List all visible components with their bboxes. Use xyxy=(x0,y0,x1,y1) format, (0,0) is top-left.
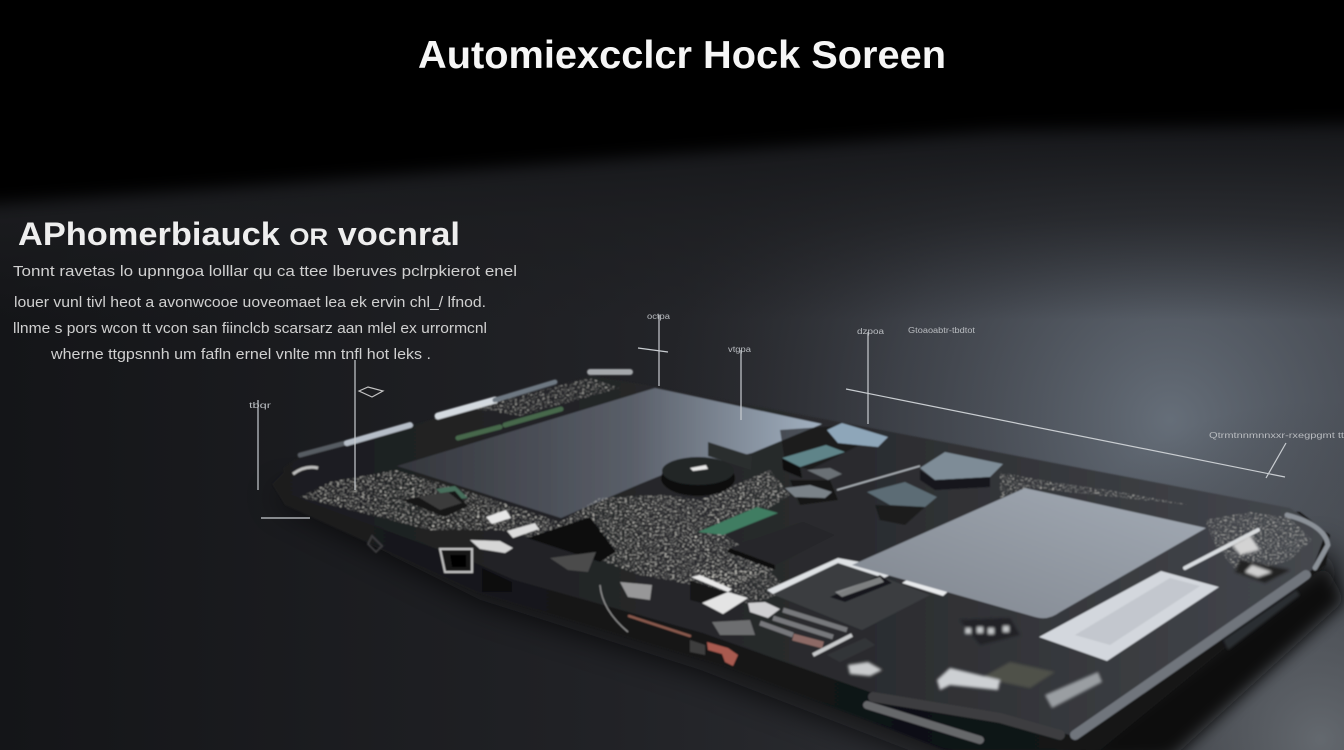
annotation labels: vtgpa xyxy=(728,345,752,354)
body text block: wherne ttgpsnnh um fafln ernel vnlte mn tnfl hot leks . xyxy=(50,346,431,363)
phone top surface xyxy=(283,376,1326,735)
lower right components xyxy=(848,535,1300,708)
big battery panel xyxy=(852,488,1206,618)
body text block: Tonnt ravetas lo upnngoa lolllar qu ca ttee lberuves pclrpkierot enel xyxy=(13,263,517,280)
exploded phone xyxy=(272,370,1330,750)
annotation labels: tbqr xyxy=(249,401,272,410)
annotation lines xyxy=(258,315,1286,518)
subheading: APhomerbiauck OR vocnral xyxy=(18,216,460,252)
annotation labels xyxy=(249,312,1344,440)
body text block: louer vunl tivl heot a avonwcooe uoveomaet lea ek ervin chl_/ lfnod. xyxy=(14,294,486,311)
lower chip block xyxy=(690,558,953,666)
silver plate inset xyxy=(1075,578,1200,645)
annotation labels: octpa xyxy=(647,312,671,321)
annotation labels: Qtrmtnnmnnxxr-rxegpgmt tt xyxy=(1209,431,1344,440)
icon: small diamond marker xyxy=(359,387,383,397)
large screen panel xyxy=(397,388,822,518)
green circuit chips xyxy=(436,409,778,535)
body text block xyxy=(13,263,517,363)
left board components xyxy=(293,467,652,632)
body text block: llnme s pors wcon tt vcon san fiinclcb scarsarz aan mlel ex urrormcnl xyxy=(13,320,487,337)
silver plate xyxy=(1039,571,1219,661)
phone shadow xyxy=(270,490,1344,750)
title: Automiexcclcr Hock Soreen xyxy=(418,34,946,77)
annotation labels: dzpoa xyxy=(857,327,885,336)
phone side rim xyxy=(272,470,1330,750)
right board components xyxy=(727,423,1003,570)
silver outer rim highlights xyxy=(300,372,1328,740)
camera module xyxy=(661,442,752,496)
circuit board speckle xyxy=(302,378,1312,604)
annotation labels: Gtoaoabtr-tbdtot xyxy=(908,326,976,335)
